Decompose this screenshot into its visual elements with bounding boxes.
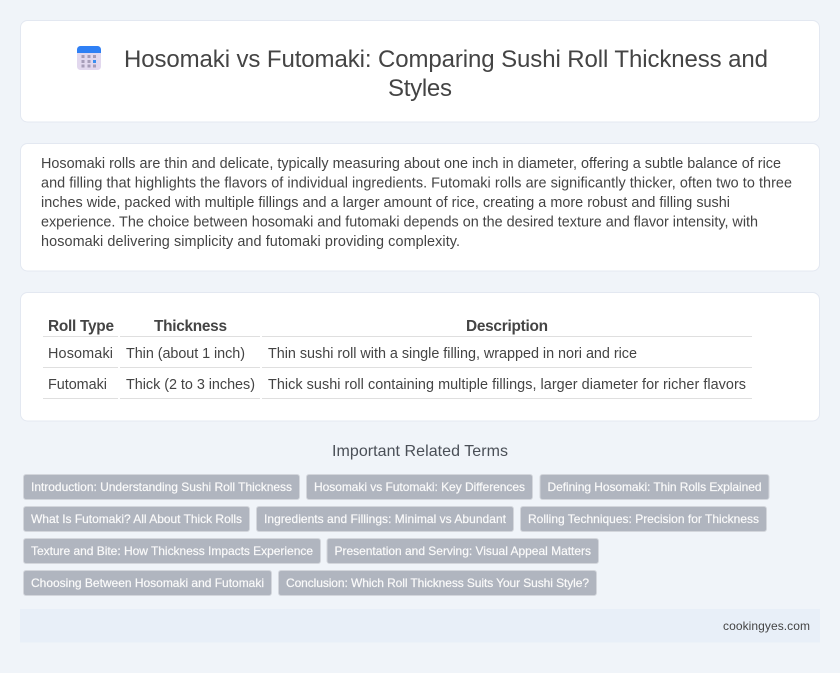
text block: summary: Hosomaki rolls are thin and delicate, typically measuring about one inch in diameter, offering a subtle balance of rice	[41, 156, 781, 172]
icon: calendar	[77, 46, 101, 70]
tag: Introduction: Understanding Sushi Roll Thickness	[31, 480, 292, 494]
panel: summary text	[20, 144, 820, 271]
tag: Texture and Bite: How Thickness Impacts Experience	[31, 544, 313, 558]
tag: Conclusion: Which Roll Thickness Suits Your Sushi Style?	[286, 576, 589, 590]
text block: summary: inches wide, packed with multiple fillings and a larger amount of rice, creating a more robust and filling sushi	[41, 195, 730, 211]
tag	[24, 570, 272, 596]
title: Hosomaki vs Futomaki: Comparing Sushi Roll Thickness and	[124, 46, 768, 73]
tag	[540, 474, 769, 500]
tag	[24, 506, 250, 532]
table header	[48, 318, 548, 335]
tag	[520, 506, 766, 532]
tag	[256, 506, 514, 532]
tag	[278, 570, 596, 596]
table header: Roll Type	[48, 318, 114, 335]
heading: related terms: Important Related Terms	[332, 443, 508, 460]
table row: Hosomaki: Thin sushi roll with a single filling, wrapped in nori and rice	[268, 346, 637, 362]
tag: What Is Futomaki? All About Thick Rolls	[31, 512, 242, 526]
table row: Hosomaki: Thin (about 1 inch)	[126, 346, 245, 362]
table row: Hosomaki	[48, 346, 637, 362]
tag	[24, 538, 320, 564]
table row: Futomaki	[48, 377, 746, 393]
footer source: cookingyes.com	[723, 619, 810, 633]
panel: comparison table	[20, 292, 820, 421]
tag	[306, 474, 532, 500]
table header: Description	[466, 318, 548, 335]
table row: Futomaki: Futomaki	[48, 377, 107, 393]
tag: Choosing Between Hosomaki and Futomaki	[31, 576, 264, 590]
text block: summary: experience. The choice between hosomaki and futomaki depends on the desired texture and flavor intensity, with	[41, 214, 758, 230]
title	[124, 46, 768, 102]
tag: Hosomaki vs Futomaki: Key Differences	[314, 480, 525, 494]
table row: Hosomaki: Hosomaki	[48, 346, 113, 362]
text block: summary	[41, 156, 792, 250]
text block: summary: and filling that highlights the flavors of individual ingredients. Futomaki rolls are significantly thicker, often two to three	[41, 176, 792, 192]
text block: summary: hosomaki delivering simplicity and futomaki providing complexity.	[41, 234, 460, 250]
tag list: related terms	[24, 474, 769, 596]
table row: Futomaki: Thick (2 to 3 inches)	[126, 377, 255, 393]
tag: Defining Hosomaki: Thin Rolls Explained	[548, 480, 762, 494]
tag	[24, 474, 300, 500]
footer bar	[20, 609, 820, 642]
tag: Presentation and Serving: Visual Appeal Matters	[334, 544, 591, 558]
table header: Thickness	[154, 318, 227, 335]
table row: Futomaki: Thick sushi roll containing multiple fillings, larger diameter for richer flavors	[268, 377, 746, 393]
tag: Rolling Techniques: Precision for Thickness	[528, 512, 759, 526]
tag: Ingredients and Fillings: Minimal vs Abundant	[264, 512, 507, 526]
tag	[327, 538, 598, 564]
title: Styles	[388, 75, 452, 102]
panel: title card	[20, 20, 820, 122]
